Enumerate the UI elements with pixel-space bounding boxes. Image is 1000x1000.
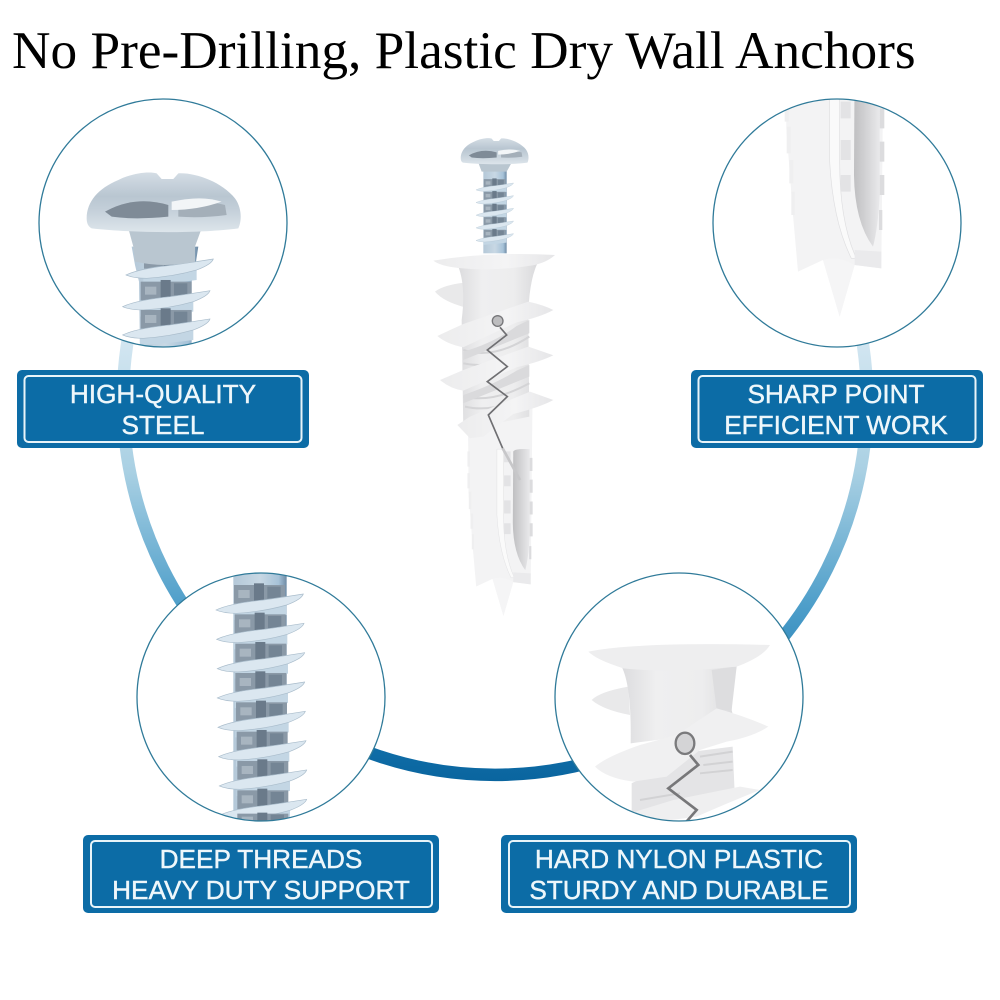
neck xyxy=(128,228,202,265)
anchor ridges xyxy=(463,337,529,408)
label: high-quality steel: STEEL xyxy=(122,410,204,440)
arc connecting the detail circles xyxy=(123,335,867,775)
label: high-quality steel: HIGH-QUALITY xyxy=(70,379,256,409)
panel: sharp point detail xyxy=(712,98,962,348)
label: high-quality steel xyxy=(17,370,309,448)
label: deep threads heavy duty support: HEAVY DUTY SUPPORT xyxy=(112,875,410,905)
panel: nylon flange detail xyxy=(555,573,803,823)
label: hard nylon plastic sturdy and durable: STURDY AND DURABLE xyxy=(529,875,829,905)
anchor core xyxy=(458,263,537,430)
label: sharp point efficient work xyxy=(691,370,983,448)
screw shaft and threads xyxy=(476,162,514,253)
anchor flange and fins xyxy=(433,254,555,438)
label: sharp point efficient work: SHARP POINT xyxy=(747,379,925,409)
panel: screw head detail xyxy=(39,99,287,355)
metal wire spring xyxy=(487,316,520,480)
product photo: screw in plastic anchor xyxy=(433,138,555,616)
label: hard nylon plastic sturdy and durable xyxy=(501,835,857,913)
label: deep threads heavy duty support xyxy=(83,835,439,913)
label: hard nylon plastic sturdy and durable: HARD NYLON PLASTIC xyxy=(535,844,823,874)
label: sharp point efficient work: EFFICIENT WORK xyxy=(724,410,948,440)
screw neck xyxy=(478,163,512,172)
screw head dome xyxy=(87,172,241,232)
screw shaft xyxy=(132,247,198,355)
screw threads xyxy=(123,248,213,345)
anchor back fin xyxy=(435,283,465,307)
screw head xyxy=(461,138,529,164)
title: No Pre-Drilling, Plastic Dry Wall Anchors xyxy=(12,21,916,80)
panel: deep threads detail xyxy=(137,570,385,835)
label: deep threads heavy duty support: DEEP THREADS xyxy=(160,844,362,874)
anchor legs xyxy=(467,408,533,616)
